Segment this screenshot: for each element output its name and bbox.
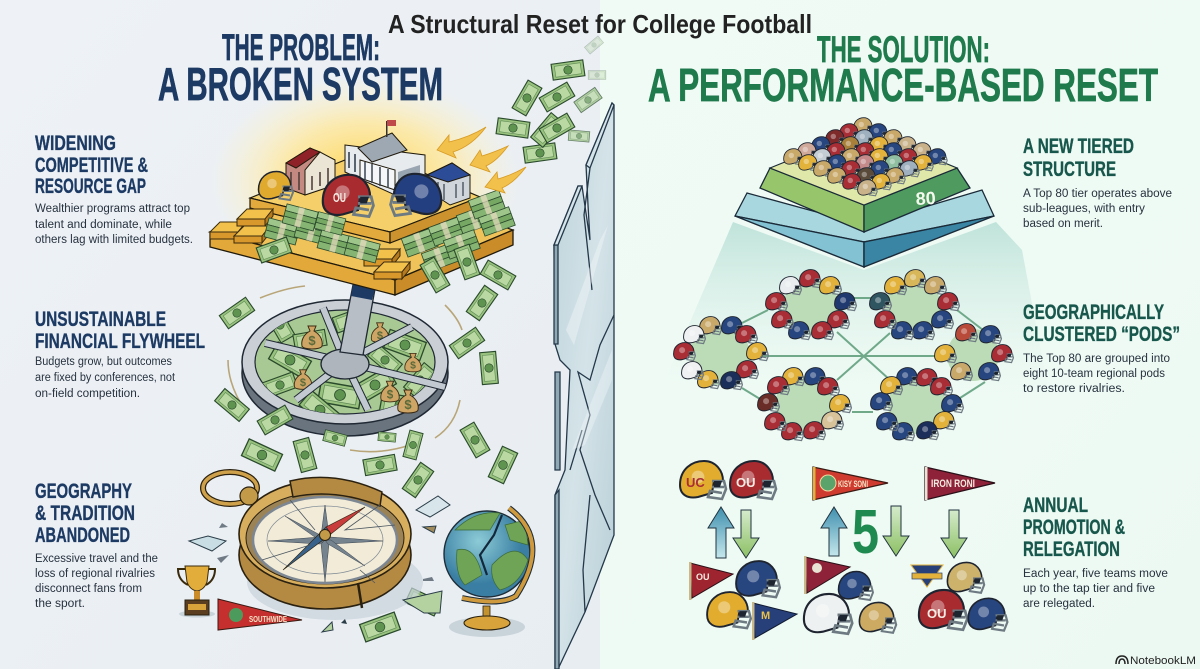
background: solution side xyxy=(600,0,1200,669)
needle xyxy=(326,507,365,534)
hanging bills xyxy=(454,244,480,280)
building: blue xyxy=(427,163,470,205)
pennant: rose: KISY SONI xyxy=(838,479,868,489)
pennant: maroon OU: OU xyxy=(696,572,710,582)
helmet: crimson OU: OU xyxy=(927,606,946,621)
building: white capitol xyxy=(345,120,425,195)
text block: pods: eight 10-team regional pods xyxy=(1023,368,1165,380)
title: A Structural Reset for College Football xyxy=(388,9,812,39)
pods xyxy=(674,270,1013,441)
text block: geography: & TRADITION xyxy=(35,502,135,525)
helmet: crimson OU: OU xyxy=(333,190,346,205)
light cone from top tier to pods xyxy=(665,222,1050,400)
cracked glass wall xyxy=(554,103,614,669)
heading: the problem: THE PROBLEM: xyxy=(222,27,380,68)
text block: tiered structure: sub-leagues, with entry xyxy=(1023,203,1145,215)
gold bars xyxy=(210,222,246,239)
heading: the problem xyxy=(158,27,443,110)
pod: south-west xyxy=(758,368,851,441)
broken rim piece xyxy=(290,477,382,506)
pennant: navy M: M xyxy=(761,610,770,622)
pod: west xyxy=(674,317,768,390)
pod: north-west xyxy=(766,270,856,340)
text block: promotion: up to the tap tier and five xyxy=(1023,583,1155,595)
pod: south-east xyxy=(871,368,963,441)
pennant: maroon rose xyxy=(804,556,850,594)
notebooklm watermark: NotebookLM xyxy=(1130,655,1196,667)
cash stacks xyxy=(264,218,300,245)
wheel body xyxy=(242,310,448,436)
green tier xyxy=(760,168,864,232)
text block: flywheel: are fixed by conferences, not xyxy=(35,372,176,384)
text block: widening gap: WIDENING xyxy=(35,132,116,155)
text block: geography: the sport. xyxy=(35,598,85,610)
cracks xyxy=(262,500,395,583)
text block: promotion xyxy=(1023,494,1168,610)
promotion: top tier teams xyxy=(680,461,995,500)
text block: pods: to restore rivalries. xyxy=(1023,383,1125,395)
helmet: tan small xyxy=(947,562,984,593)
text block: promotion: PROMOTION & xyxy=(1023,516,1125,539)
text block: geography: GEOGRAPHY xyxy=(35,480,132,503)
helmet: yellow UC xyxy=(680,461,726,499)
text block: widening gap xyxy=(35,132,193,246)
broken compass xyxy=(203,472,423,620)
text block: flywheel xyxy=(35,308,205,400)
text block: promotion: are relegated. xyxy=(1023,598,1095,610)
ring xyxy=(203,472,257,504)
helmet: crimson OU: OU xyxy=(736,475,756,490)
text block: promotion: Each year, five teams move xyxy=(1023,568,1168,580)
text block: promotion: ANNUAL xyxy=(1023,494,1088,517)
text block: geography: Excessive travel and the xyxy=(35,553,158,565)
pod: north-east xyxy=(870,270,959,340)
heading: the solution xyxy=(648,29,1158,111)
text block: flywheel: Budgets grow, but outcomes xyxy=(35,356,172,368)
upper deck xyxy=(250,150,480,232)
pole xyxy=(340,285,375,355)
tiered pyramid xyxy=(735,118,994,267)
text block: geography: loss of regional rivalries xyxy=(35,568,155,580)
text block: tiered structure: A Top 80 tier operates above xyxy=(1023,188,1172,200)
text block: tiered structure xyxy=(1023,135,1172,230)
text block: widening gap: talent and dominate, while xyxy=(35,219,172,231)
pennant: rose xyxy=(813,467,888,500)
pod: east xyxy=(935,324,1013,381)
compass rose xyxy=(268,505,383,582)
text block: geography: disconnect fans from xyxy=(35,583,142,595)
text block: pods xyxy=(1023,301,1180,395)
pennant: iron xyxy=(925,467,995,500)
helmet: yellow UC: UC xyxy=(686,475,705,490)
helmet: gold xyxy=(258,172,293,200)
text block: promotion: RELEGATION xyxy=(1023,538,1120,561)
label 80: 80 xyxy=(915,188,936,209)
glow behind the elite platform xyxy=(210,75,520,285)
pennant: southwide xyxy=(218,599,302,630)
helmet: navy WV xyxy=(968,598,1007,631)
text block: geography: ABANDONED xyxy=(35,524,130,547)
helmets on top tier xyxy=(784,118,947,196)
bright arrows pointing into the elite platform xyxy=(437,127,526,193)
text block: widening gap: COMPETITIVE & xyxy=(35,154,148,177)
case xyxy=(239,501,411,609)
hub xyxy=(321,349,369,379)
helmet: navy small xyxy=(838,572,873,600)
flying bills: top right stream xyxy=(496,36,606,163)
promotion: lower tier teams xyxy=(689,556,1007,640)
text block: widening gap: Wealthier programs attract top xyxy=(35,203,190,215)
lower slab xyxy=(210,180,513,280)
helmet: navy xyxy=(736,561,780,597)
pennant: navy M xyxy=(752,602,797,640)
text block: pods: The Top 80 are grouped into xyxy=(1023,353,1170,365)
helmet: yellow xyxy=(707,592,751,628)
glass and rock shards xyxy=(189,496,450,632)
elite platform with buildings and money xyxy=(210,120,515,295)
money inside wheel xyxy=(262,312,434,414)
text block: flywheel: on-field competition. xyxy=(35,388,140,400)
heading: the problem: A BROKEN SYSTEM xyxy=(158,58,443,110)
text block: flywheel: FINANCIAL FLYWHEEL xyxy=(35,330,205,353)
trophy xyxy=(178,566,215,618)
pennant: maroon OU xyxy=(689,562,733,600)
helmet: crimson OU xyxy=(730,461,776,499)
text block: tiered structure: based on merit. xyxy=(1023,218,1103,230)
text block: tiered structure: A NEW TIERED xyxy=(1023,135,1134,158)
helmet: crimson OU xyxy=(323,175,373,217)
globe xyxy=(444,508,532,637)
building: red xyxy=(286,148,335,195)
helmet: white xyxy=(804,594,852,634)
helmet: navy gold xyxy=(391,174,441,216)
text block: widening gap: RESOURCE GAP xyxy=(35,175,146,198)
text block: geography xyxy=(35,480,158,610)
pennant: iron: IRON RONI xyxy=(931,478,975,490)
number five: 5 xyxy=(852,498,879,567)
logo: varsity V xyxy=(911,565,943,587)
heading: the solution: THE SOLUTION: xyxy=(817,29,990,70)
flywheel xyxy=(228,285,462,452)
flying bills around flywheel xyxy=(215,260,518,642)
text block: widening gap: others lag with limited budgets. xyxy=(35,234,193,246)
pod connector lines xyxy=(742,298,985,412)
helmet: tan xyxy=(859,602,896,633)
motion swirls xyxy=(228,286,462,452)
base tier xyxy=(735,190,994,242)
pennant: southwide: SOUTHWIDE xyxy=(249,615,288,624)
text block: flywheel: UNSUSTAINABLE xyxy=(35,308,166,331)
text block: tiered structure: STRUCTURE xyxy=(1023,158,1116,181)
arrows: promotion and relegation xyxy=(708,506,967,558)
helmet: crimson OU xyxy=(919,590,967,630)
spokes xyxy=(265,308,445,410)
background: problem side xyxy=(0,0,600,669)
